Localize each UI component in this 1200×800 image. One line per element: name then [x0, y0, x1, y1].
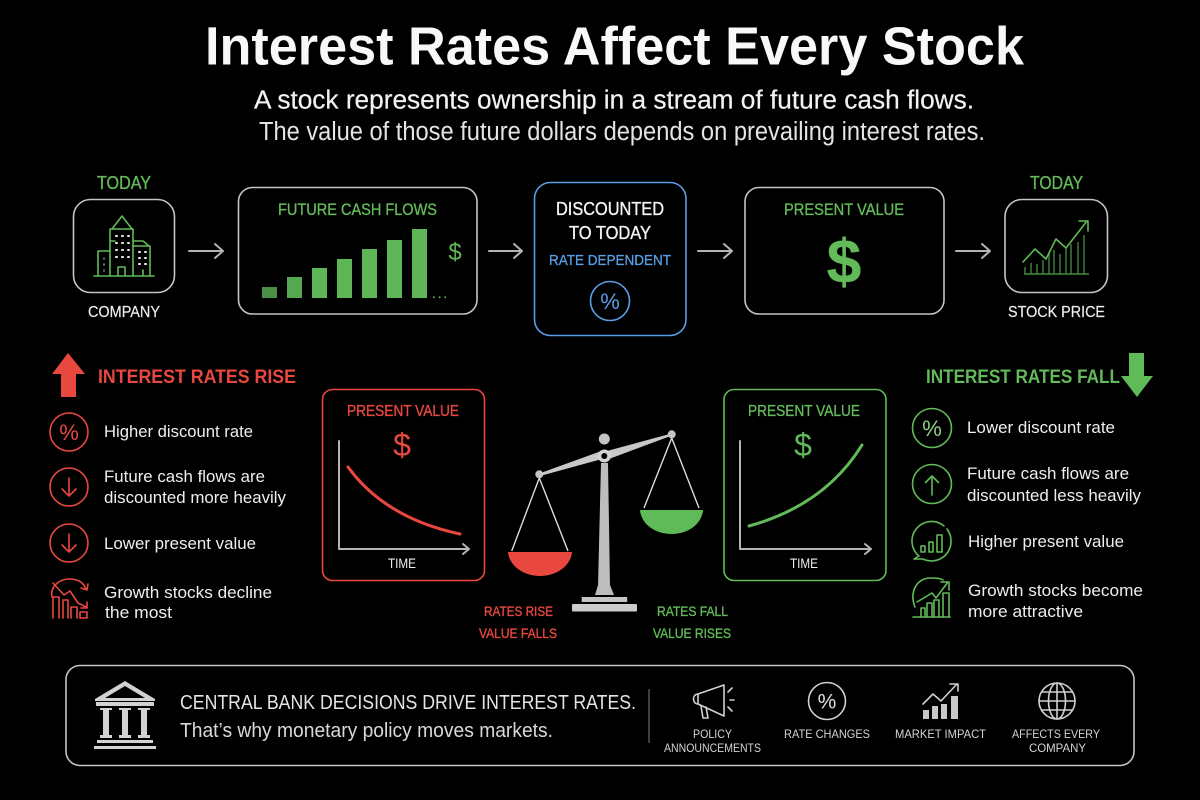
chart: present value falls: TIME — [388, 556, 416, 571]
left pan — [508, 552, 572, 576]
panel: discounted to today: TO TODAY — [569, 223, 651, 243]
item: growth stocks decline — [52, 579, 272, 622]
flow step: stock price today: TODAY — [1030, 173, 1083, 193]
panel: discounted to today: RATE DEPENDENT — [549, 252, 671, 269]
item: affects every company: COMPANY — [1029, 741, 1086, 755]
panel: discounted to today — [534, 182, 686, 336]
item: lower discount rate: Lower discount rate — [967, 418, 1115, 437]
item: rate changes — [784, 682, 870, 741]
heading: rates rise: INTEREST RATES RISE — [98, 366, 296, 388]
scale label: rates fall: RATES FALL — [657, 604, 728, 619]
item: higher discount rate: Higher discount rate — [104, 422, 253, 441]
item: discounted less heavily: Future cash flows are — [967, 464, 1129, 483]
chart: present value rises: PRESENT VALUE — [748, 403, 860, 420]
arrow: company to cash flows — [189, 244, 223, 258]
item: lower discount rate — [912, 408, 1115, 448]
panel: future cash flows: ... — [432, 286, 447, 301]
bar chart: growing cash flows — [262, 229, 427, 298]
item: affects every company: AFFECTS EVERY — [1012, 727, 1100, 741]
item: growth stocks decline: the most — [105, 603, 172, 622]
flow step: company today: COMPANY — [88, 304, 160, 321]
item: growth stocks attractive — [913, 578, 1143, 621]
item: policy announcements: POLICY — [693, 727, 732, 741]
item: policy announcements — [664, 685, 761, 755]
panel: present value — [745, 188, 944, 314]
item: rate changes: % — [818, 690, 836, 714]
item: discounted more heavily: discounted more heavily — [104, 488, 286, 507]
item: policy announcements: ANNOUNCEMENTS — [664, 741, 761, 755]
item: growth stocks attractive: more attractive — [968, 602, 1083, 621]
chart: present value rises — [724, 390, 886, 580]
panel: discounted to today: DISCOUNTED — [556, 199, 664, 219]
arrow: cash flows to discount — [489, 244, 522, 258]
chart: present value rises: $ — [794, 427, 812, 463]
panel: future cash flows — [238, 188, 477, 314]
item: discounted more heavily: Future cash flows are — [104, 467, 265, 486]
subtitle: The value of those future dollars depends on prevailing interest rates. — [259, 118, 985, 146]
icon: up arrow — [52, 353, 85, 397]
item: affects every company — [1012, 683, 1100, 755]
scale label: rates rise: RATES RISE — [484, 604, 553, 619]
panel: future cash flows: FUTURE CASH FLOWS — [278, 200, 437, 219]
item: market impact: MARKET IMPACT — [895, 727, 987, 741]
icon: stock chart — [1023, 221, 1089, 274]
flow step: company today — [74, 173, 174, 321]
scale label: rates rise: VALUE FALLS — [479, 626, 557, 641]
item: rate changes: RATE CHANGES — [784, 727, 870, 741]
scale label: rates fall: VALUE RISES — [653, 626, 731, 641]
heading: rates fall: INTEREST RATES FALL — [926, 366, 1120, 388]
flow step: company today: TODAY — [97, 173, 151, 193]
panel: present value: $ — [827, 228, 861, 297]
arrow: present value to stock price — [956, 244, 990, 258]
panel: interest rates fall — [912, 353, 1153, 621]
scale label: rates fall — [653, 604, 731, 641]
icon: balance scale — [508, 430, 703, 612]
icon: percent — [590, 282, 630, 320]
item: lower present value — [50, 524, 256, 562]
item: lower discount rate: % — [922, 416, 942, 441]
subtitle — [254, 86, 985, 146]
panel: central bank banner: CENTRAL BANK DECISIONS DRIVE INTEREST RATES. — [180, 692, 636, 714]
chart: present value falls: $ — [393, 427, 411, 463]
item: discounted more heavily — [50, 467, 286, 507]
item: discounted less heavily: discounted less heavily — [967, 486, 1141, 505]
arrow: discount to present value — [698, 244, 732, 258]
panel: central bank banner: That’s why monetary policy moves markets. — [180, 720, 553, 742]
panel: interest rates rise — [50, 353, 296, 622]
item: growth stocks decline: Growth stocks decline — [104, 583, 272, 602]
icon: down arrow — [1121, 353, 1153, 397]
panel: present value: PRESENT VALUE — [784, 200, 904, 219]
item: higher discount rate: % — [59, 420, 79, 445]
icon: company building — [94, 216, 154, 276]
item: market impact — [895, 684, 987, 741]
panel: future cash flows: $ — [448, 239, 462, 266]
item: higher present value: Higher present value — [968, 532, 1124, 551]
icon: percent: % — [600, 289, 620, 314]
item: higher present value — [912, 521, 1124, 561]
chart: present value rises: TIME — [790, 556, 818, 571]
item: higher discount rate — [50, 413, 253, 451]
right pan — [640, 510, 703, 534]
item: growth stocks attractive: Growth stocks become — [968, 581, 1143, 600]
scale label: rates rise — [479, 604, 557, 641]
panel: central bank banner — [66, 666, 1134, 766]
item: lower present value: Lower present value — [104, 534, 256, 553]
flow step: stock price today: STOCK PRICE — [1008, 304, 1105, 321]
subtitle: A stock represents ownership in a stream of future cash flows. — [254, 86, 974, 114]
flow step: stock price today — [1005, 173, 1108, 321]
chart: present value falls — [322, 390, 484, 580]
item: discounted less heavily — [912, 464, 1141, 505]
title: Interest Rates Affect Every Stock — [205, 18, 1024, 76]
icon: central bank — [94, 681, 156, 749]
chart: present value falls: PRESENT VALUE — [347, 403, 459, 420]
